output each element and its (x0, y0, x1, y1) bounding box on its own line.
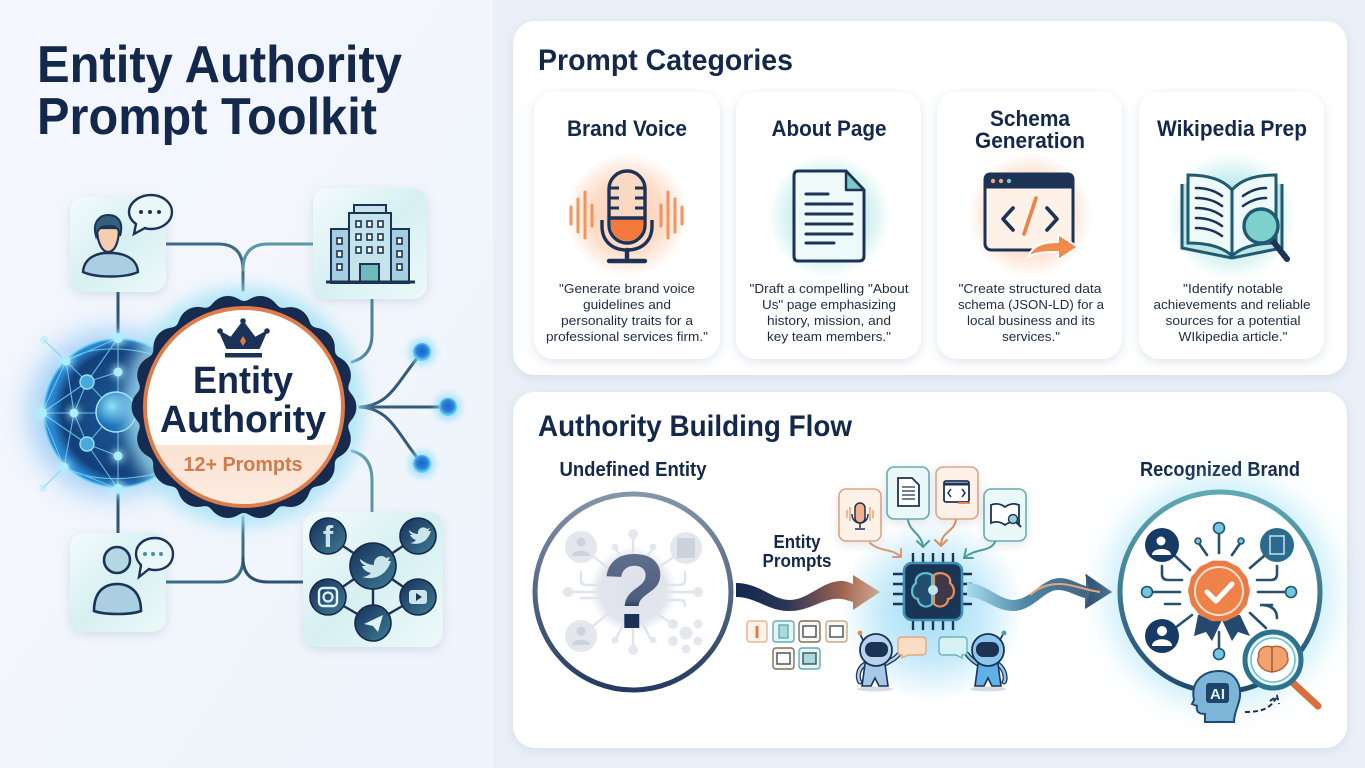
icon: microphone (565, 153, 689, 277)
card: brand voice (534, 92, 720, 359)
label: entity prompts (762, 532, 832, 571)
prompt text: guidelines and (583, 297, 671, 312)
prompt text: professional services firm." (546, 329, 708, 344)
arrows into chip (870, 520, 995, 558)
entity authority badge: Authority (160, 399, 326, 441)
label: undefined entity: Undefined Entity (560, 459, 707, 481)
card: wikipedia prep (1139, 92, 1324, 359)
right satellite nodes (409, 339, 461, 477)
title: Entity Authority (37, 36, 402, 94)
prompt text: WIkipedia article." (1178, 329, 1288, 344)
panel: prompt categories (513, 21, 1347, 375)
award seal (1190, 562, 1248, 620)
small prompt tiles (747, 621, 847, 669)
prompt text: key team members." (767, 329, 891, 344)
AI head (1192, 671, 1240, 722)
tile: social network (303, 512, 443, 647)
card: wikipedia prep: Wikipedia Prep (1157, 116, 1307, 141)
12+ prompts band (154, 445, 334, 504)
ribbon (1194, 615, 1250, 641)
recognized brand circle (1106, 478, 1334, 722)
connector lines (118, 244, 448, 582)
prompt text: services." (1002, 329, 1060, 344)
prompt text (958, 281, 1105, 344)
badge text: Entity (193, 360, 293, 402)
prompt text: "Draft a compelling "About (750, 281, 909, 296)
AI head: AI (1210, 686, 1225, 703)
dashed arrow (1245, 696, 1279, 712)
magnifier with brain (1245, 632, 1318, 706)
card: schema generation: Schema (990, 106, 1071, 131)
icon: document (767, 154, 891, 278)
tile: document (887, 467, 929, 519)
tile: microphone (839, 489, 881, 541)
prompt text: schema (JSON-LD) for a (958, 297, 1105, 312)
card: schema generation: Generation (975, 128, 1085, 153)
prompt text: "Generate brand voice (559, 281, 695, 296)
prompt text: "Identify notable (1183, 281, 1283, 296)
icon: AI chip with brain (893, 553, 972, 630)
prompt text: sources for a potential (1166, 313, 1301, 328)
arrow: entity prompts wave (736, 575, 880, 611)
robot: right (967, 631, 1006, 692)
tile: person with speech bubble (70, 195, 172, 292)
entity hub diagram (30, 188, 461, 647)
prompt text (1154, 281, 1310, 344)
prompt text (750, 281, 909, 344)
tile: book (984, 489, 1026, 541)
arrow: brand wave (967, 574, 1112, 611)
entity authority badge: 12+ Prompts (184, 454, 302, 476)
left panel background (0, 0, 493, 768)
central processing glow (840, 518, 1024, 702)
robot: left (857, 631, 899, 692)
speech bubble: left (898, 637, 926, 658)
question mark: ? (602, 533, 666, 651)
tile: social network: f (323, 519, 334, 554)
prompt text: "Create structured data (958, 281, 1102, 296)
heading: prompt categories: Prompt Categories (538, 44, 793, 77)
icon: code window (968, 153, 1092, 277)
input tiles (839, 467, 1026, 541)
tile: office building (313, 188, 427, 299)
prompt text (546, 281, 708, 344)
heading: authority building flow: Authority Building Flow (538, 410, 853, 443)
prompt text: personality traits for a (561, 313, 694, 328)
prompt text: local business and its (967, 313, 1096, 328)
label: entity prompts: Prompts (762, 551, 832, 571)
entity authority badge (124, 287, 364, 527)
entity nodes (1145, 528, 1294, 653)
card: about page (736, 92, 921, 359)
card: about page: About Page (772, 116, 886, 141)
card: schema generation (937, 92, 1122, 359)
label: entity prompts: Entity (774, 532, 820, 552)
prompt text: history, mission, and (767, 313, 891, 328)
title: Prompt Toolkit (37, 88, 377, 146)
tile: user with speech bubble (70, 533, 173, 632)
label: recognized brand: Recognized Brand (1140, 459, 1300, 481)
title (37, 36, 402, 146)
network globe (30, 331, 194, 496)
prompt text: Us" page emphasizing (762, 297, 896, 312)
panel: authority building flow (513, 392, 1347, 748)
prompt text: achievements and reliable (1154, 297, 1310, 312)
card: brand voice: Brand Voice (567, 116, 687, 141)
icon: crown (217, 318, 270, 358)
tile: code (936, 467, 978, 519)
speech bubble: right (939, 637, 967, 658)
icon: open book and magnifier (1168, 152, 1296, 280)
undefined entity circle (535, 494, 731, 690)
